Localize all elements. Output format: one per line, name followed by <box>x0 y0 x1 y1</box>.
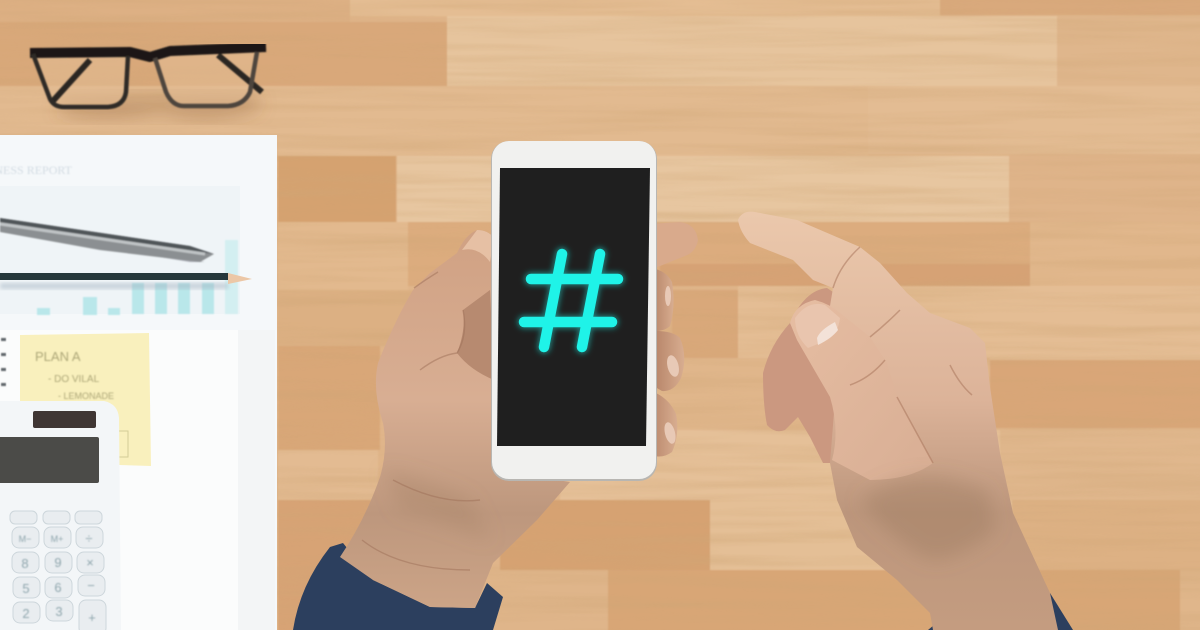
screen <box>497 168 650 446</box>
phone <box>491 141 657 481</box>
calculator key labels: × <box>86 555 94 570</box>
calculator key labels: 3 <box>55 604 63 619</box>
calculator key labels: 9 <box>54 555 62 570</box>
chart bars <box>37 240 238 315</box>
calculator key labels: 2 <box>22 606 30 621</box>
calculator key labels: M− <box>19 534 31 544</box>
calculator key labels: 6 <box>54 580 62 595</box>
right hand <box>738 212 1058 630</box>
sticky note: PLAN A <box>35 349 81 364</box>
sticky note: - LEMONADE <box>58 391 114 401</box>
wrist shading <box>385 470 490 540</box>
little finger <box>646 393 677 456</box>
thumb tip <box>462 230 494 262</box>
calculator key labels: ÷ <box>85 531 93 546</box>
left hand <box>340 230 570 608</box>
wrist shadow <box>860 476 995 560</box>
lenses <box>34 52 258 107</box>
knuckle creases <box>362 272 480 570</box>
sticky note: - CALL LIZIA <box>60 412 112 422</box>
palm fold shadow <box>457 290 494 380</box>
chart grid <box>0 186 240 314</box>
sticky note: - DO VILAL <box>48 374 100 385</box>
hashtag icon <box>524 254 618 347</box>
ring finger <box>650 331 684 391</box>
left sleeve <box>293 543 503 630</box>
index finger <box>650 222 698 270</box>
calculator key labels: 5 <box>22 581 30 596</box>
glasses <box>30 47 266 118</box>
pen <box>0 218 214 262</box>
binder rings <box>1 338 6 386</box>
pencil <box>0 273 252 289</box>
creases <box>833 247 972 463</box>
calculator <box>0 401 121 630</box>
calculator key labels <box>19 531 96 625</box>
fingernails <box>662 286 681 445</box>
thumbnail <box>795 304 840 348</box>
middle finger <box>650 268 674 331</box>
fingers behind phone <box>646 222 698 456</box>
calculator key labels: 8 <box>21 556 29 571</box>
calculator key labels: M+ <box>51 534 63 544</box>
curled fingers <box>763 288 850 463</box>
glasses shadow <box>60 96 260 118</box>
palm and thumb <box>340 230 570 608</box>
back of hand <box>738 212 1058 630</box>
calculator key labels: − <box>87 578 95 593</box>
calculator keys <box>10 511 106 630</box>
frame <box>30 47 266 107</box>
paper report <box>0 135 277 630</box>
thumb <box>790 300 933 480</box>
sheet below chart <box>0 330 238 630</box>
right sleeve <box>928 593 1073 630</box>
sticky note <box>20 333 151 466</box>
calculator key labels: + <box>88 610 96 625</box>
